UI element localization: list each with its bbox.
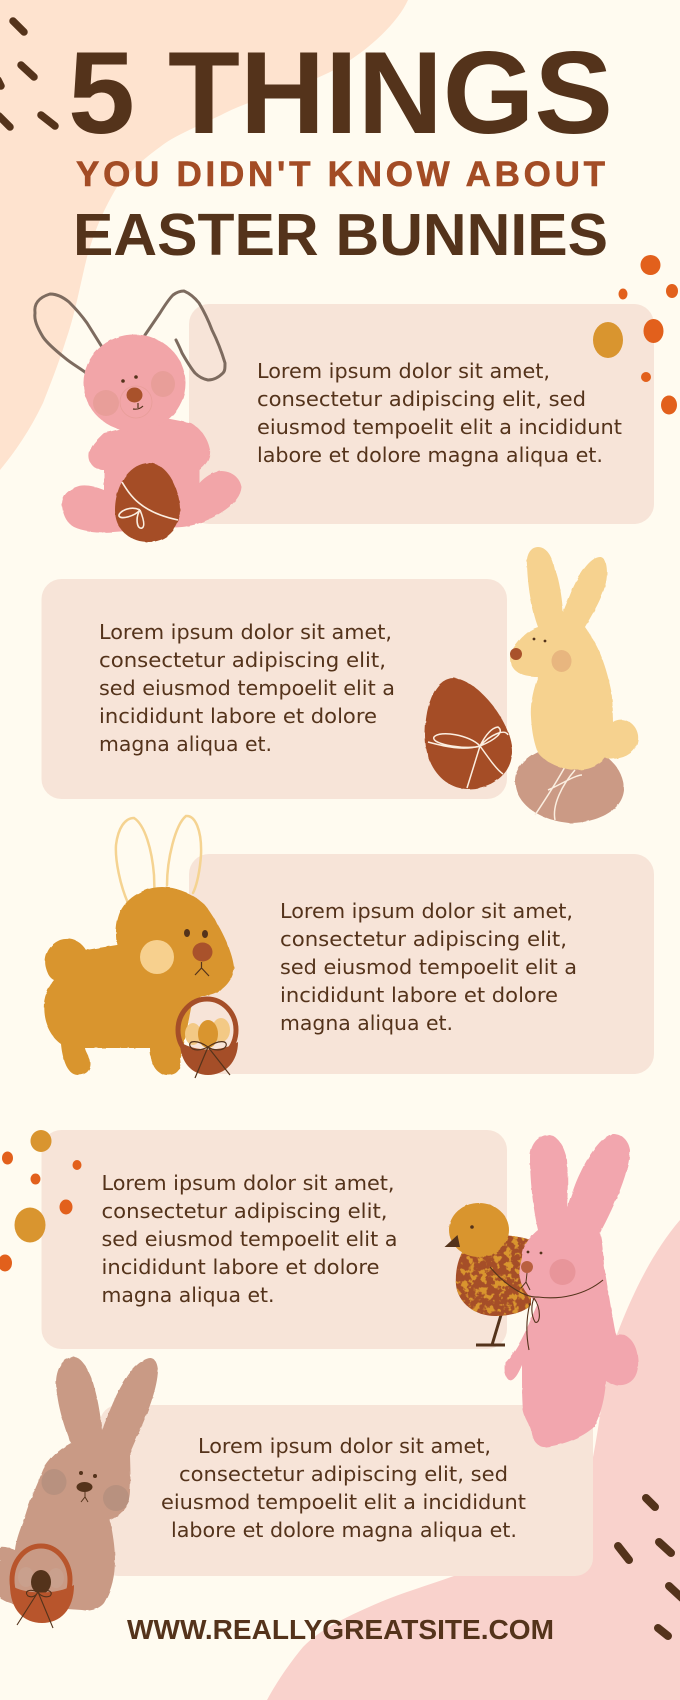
text block: fact one: consectetur adipiscing elit, sed [257,387,586,411]
decorative dashes top-left [0,21,55,127]
text block: fact four: consectetur adipiscing elit, [102,1199,388,1223]
text block: fact one [257,359,622,467]
text block: fact one: eiusmod tempoelit elit a incididunt [257,415,622,439]
icon: taupe bunny with basket [0,1357,158,1628]
footer website: WWW.REALLYGREATSITE.COM [127,1614,554,1645]
panel: fact four [42,1130,507,1349]
panel: fact one [189,304,654,524]
text block: fact two: magna aliqua et. [99,732,272,756]
text block: fact four: Lorem ipsum dolor sit amet, [102,1171,394,1195]
heading: you didn't know about: YOU DIDN'T KNOW ABOUT [76,155,605,194]
text block: fact two: consectetur adipiscing elit, [99,648,386,672]
text block: fact three: consectetur adipiscing elit, [280,927,567,951]
title [68,27,613,268]
text block: fact two: Lorem ipsum dolor sit amet, [99,620,392,644]
heading: 5 things: 5 [68,27,135,158]
text block: fact five: Lorem ipsum dolor sit amet, [198,1434,491,1458]
dots: left cluster [0,1130,82,1272]
background blob: pink bottom-right [267,1220,680,1700]
text block: fact three: Lorem ipsum dolor sit amet, [280,899,573,923]
text block: fact four: magna aliqua et. [102,1283,274,1307]
text block: fact four: incididunt labore et dolore [102,1255,380,1279]
panel: fact three [189,854,654,1074]
icon: brown egg with bow [425,678,512,789]
panel: fact two [42,579,507,799]
text block: fact four: sed eiusmod tempoelit elit a [102,1227,397,1251]
text block: fact two: incididunt labore et dolore [99,704,377,728]
text block: fact one: labore et dolore magna aliqua et. [257,443,603,467]
dots: top right cluster [593,255,678,414]
panel: fact five [100,1405,593,1576]
icon: mauve egg [515,745,624,823]
text block: fact five: consectetur adipiscing elit, sed [179,1462,508,1486]
text block: fact five: eiusmod tempoelit elit a incididunt [161,1490,526,1514]
text block: fact two [99,620,395,756]
icon: basket with eggs [178,999,238,1078]
icon: pink bunny with chick [444,1134,638,1447]
icon: yellow bunny with eggs [425,547,638,823]
text block: fact four [102,1171,397,1307]
text block: fact three [280,899,577,1035]
text block: fact three: sed eiusmod tempoelit elit a [280,955,577,979]
background blob: peach top-left [0,0,408,470]
icon: chick [444,1203,535,1345]
text block: fact five: labore et dolore magna aliqua et. [171,1518,517,1542]
text block: fact two: sed eiusmod tempoelit elit a [99,676,395,700]
text block: fact one: Lorem ipsum dolor sit amet, [257,359,550,383]
icon: pink bunny with egg [35,291,242,542]
decorative dashes bottom-right [618,1498,680,1636]
text block: fact five [161,1434,526,1542]
text block: fact three: magna aliqua et. [280,1011,453,1035]
icon: ochre bunny with basket [44,816,238,1078]
heading: easter bunnies: EASTER BUNNIES [73,202,608,268]
heading: 5 things: THINGS [168,27,613,158]
icon: basket with dark egg [10,1546,74,1628]
text block: fact three: incididunt labore et dolore [280,983,558,1007]
icon: brown egg with bow [115,463,180,542]
